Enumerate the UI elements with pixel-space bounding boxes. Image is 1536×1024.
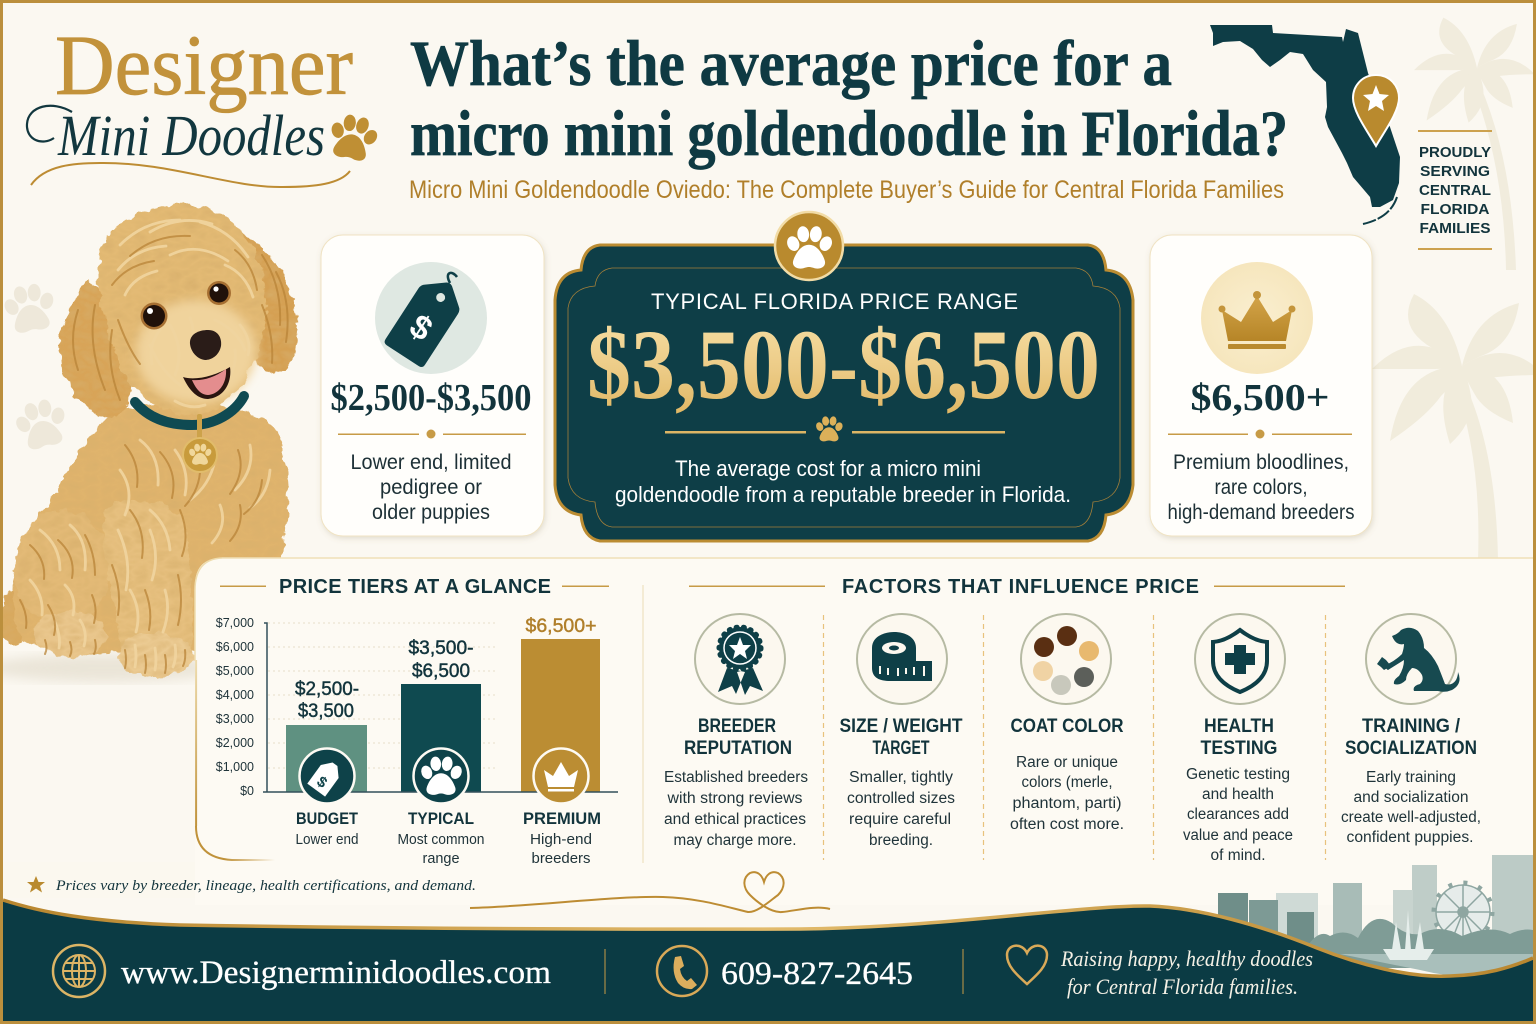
factor: size and weight target: SIZE / WEIGHT — [840, 716, 963, 737]
proudly serving note — [1418, 130, 1492, 250]
factor: breeder reputation — [664, 614, 808, 849]
footer tagline: Raising happy, healthy doodles — [1060, 946, 1313, 971]
icon: heart — [1007, 946, 1047, 984]
chart axes — [263, 623, 618, 792]
factor: health testing: value and peace — [1183, 827, 1293, 844]
bar: budget — [286, 725, 367, 792]
tier label: budget: Lower end — [296, 831, 358, 848]
chart y axis labels: $4,000 — [216, 688, 254, 702]
chart y axis labels — [216, 616, 254, 798]
map pin — [1353, 75, 1399, 146]
bar: typical — [401, 684, 481, 792]
icon: award ribbon — [695, 614, 785, 704]
Florida map with pin — [1210, 25, 1400, 224]
proudly serving note: FLORIDA — [1420, 202, 1490, 218]
tier label: premium — [523, 809, 601, 867]
map: Florida silhouette — [1210, 25, 1400, 207]
plaque medallion — [775, 212, 843, 280]
tier label: premium: breeders — [532, 850, 590, 867]
factor: training and socialization: confident puppies. — [1346, 829, 1474, 846]
factor: breeder reputation: Established breeders — [664, 769, 808, 786]
factor: coat color: phantom, parti) — [1012, 795, 1122, 812]
tier label: typical — [398, 809, 484, 867]
plaque price: $3,500-$6,500 — [587, 309, 1100, 420]
paw print watermark: upper — [0, 280, 61, 336]
factor: health testing: HEALTH — [1204, 716, 1274, 737]
footer band — [3, 900, 1533, 1021]
tier label: budget — [296, 809, 359, 848]
factor: size and weight target: TARGET — [872, 738, 930, 759]
budget price: $2,500-$3,500 — [330, 377, 532, 419]
phone number: 609-827-2645 — [721, 956, 913, 992]
puppy collar — [135, 396, 244, 425]
panel: premium price card — [1150, 235, 1372, 536]
city skyline — [1218, 855, 1533, 977]
premium description: Premium bloodlines, — [1173, 451, 1349, 474]
factor: coat color: often cost more. — [1010, 816, 1124, 833]
bar value: budget: $3,500 — [298, 701, 354, 722]
tier label: typical: Most common — [398, 831, 484, 848]
divider — [1168, 430, 1352, 438]
icon: health shield — [1195, 614, 1285, 704]
bar value: typical — [408, 638, 474, 682]
chart gridlines — [268, 623, 495, 768]
map: Florida Keys — [1363, 197, 1397, 224]
icon: tape measure — [857, 614, 947, 704]
pin star — [1363, 85, 1389, 111]
factor: health testing: of mind. — [1210, 847, 1266, 864]
palm tree watermark: top right — [1414, 18, 1535, 270]
logo wordmark: Mini Doodles: Mini Doodles — [57, 103, 325, 168]
puppy fur shading — [20, 236, 288, 673]
icon: price tag: $ — [403, 307, 439, 349]
footer tagline: for Central Florida families. — [1067, 974, 1298, 999]
factor: training and socialization: create well-adjusted, — [1341, 809, 1481, 826]
factors heading: FACTORS THAT INFLUENCE PRICE — [842, 576, 1199, 598]
factor: health testing — [1183, 614, 1293, 864]
icon: typical paw — [414, 748, 468, 804]
proudly serving note: FAMILIES — [1420, 221, 1491, 237]
plaque description: The average cost for a micro mini — [675, 456, 981, 481]
website: www.Designerminidoodles.com — [121, 955, 551, 991]
cream background behind footnote — [3, 862, 195, 898]
factor: health testing: Genetic testing — [1186, 766, 1290, 783]
icon: budget tag — [300, 748, 354, 804]
footer tagline — [1060, 946, 1313, 999]
chart heading: PRICE TIERS AT A GLANCE — [279, 576, 551, 598]
puppy left eye — [140, 302, 168, 330]
bar value: premium: $6,500+ — [526, 616, 596, 637]
ferris wheel — [1434, 883, 1492, 950]
factor: coat color: COAT COLOR — [1010, 716, 1124, 737]
fountain — [1383, 910, 1434, 960]
bar value: budget — [295, 679, 359, 722]
factor: training and socialization: TRAINING / — [1362, 716, 1461, 737]
icon: sitting dog — [1366, 614, 1460, 704]
tier label: budget: BUDGET — [296, 809, 359, 828]
logo — [27, 17, 383, 187]
chart y axis labels: $3,000 — [216, 712, 254, 726]
premium price: $6,500+ — [1190, 377, 1330, 419]
chart y axis labels: $6,000 — [216, 640, 254, 654]
icon: crown — [1201, 262, 1313, 374]
proudly serving note: PROUDLY — [1419, 145, 1491, 161]
icon: budget tag: $ — [313, 773, 331, 792]
logo wordmark: Designer: Designer — [55, 17, 353, 113]
lake — [1340, 954, 1533, 977]
premium description — [1168, 451, 1354, 524]
tier label: typical: TYPICAL — [408, 809, 474, 828]
logo flourish on M — [27, 106, 72, 142]
panel: lower information band — [195, 558, 1533, 905]
puppy mouth and tongue — [183, 367, 230, 399]
panel: budget price card — [321, 235, 544, 536]
factor: coat color: colors (merle, — [1022, 774, 1112, 791]
heart ornament — [470, 872, 830, 912]
budget description — [350, 451, 512, 524]
chart y axis labels: $5,000 — [216, 664, 254, 678]
section: price tiers chart — [216, 576, 618, 867]
factor: training and socialization: Early training — [1366, 769, 1456, 786]
section: factors that influence price — [664, 576, 1481, 864]
factor: size and weight target — [840, 614, 963, 849]
factor: breeder reputation: BREEDER — [698, 716, 776, 737]
factor: size and weight target: controlled sizes — [847, 790, 955, 807]
factor: breeder reputation: with strong reviews — [666, 790, 803, 807]
proudly serving note: SERVING — [1420, 164, 1490, 180]
panel: typical price plaque — [555, 212, 1133, 541]
paw print watermark: lower — [10, 394, 73, 453]
bar value: budget: $2,500- — [295, 679, 359, 700]
chart y axis labels: $2,000 — [216, 736, 254, 750]
icon: footnote star — [27, 876, 45, 892]
divider — [338, 430, 526, 438]
footnote: Prices vary by breeder, lineage, health certifications, and demand. — [55, 878, 476, 894]
budget description: older puppies — [372, 501, 490, 524]
factor: training and socialization: and socialization — [1354, 789, 1468, 806]
tier label: typical: range — [422, 850, 460, 867]
subtitle: Micro Mini Goldendoodle Oviedo: The Complete Buyer’s Guide for Central Florida Families — [409, 176, 1284, 204]
chart y axis labels: $1,000 — [216, 760, 254, 774]
chart y axis labels: $7,000 — [216, 616, 254, 630]
budget description: Lower end, limited — [350, 451, 512, 474]
puppy collar tag — [183, 414, 217, 472]
tree line — [1305, 919, 1533, 968]
puppy nose — [190, 330, 221, 360]
icon: price tag — [375, 262, 487, 374]
factor: size and weight target: require careful — [849, 811, 951, 828]
factor: size and weight target: breeding. — [869, 832, 933, 849]
factor: health testing: and health — [1202, 786, 1274, 803]
proudly serving note: CENTRAL — [1419, 183, 1491, 199]
factor: training and socialization — [1341, 614, 1481, 846]
logo swoosh — [31, 163, 350, 187]
plaque heading: TYPICAL FLORIDA PRICE RANGE — [651, 289, 1018, 314]
plaque divider with paw — [665, 416, 1005, 441]
puppy ground shadow — [0, 654, 223, 682]
factor: health testing: clearances add — [1187, 806, 1289, 823]
factor: health testing: TESTING — [1200, 738, 1278, 759]
puppy right eye — [207, 281, 231, 305]
puppy fur highlights — [30, 220, 270, 670]
icon: globe — [53, 945, 105, 997]
factor: coat color — [1010, 614, 1124, 833]
factor: breeder reputation: may charge more. — [674, 832, 796, 849]
bar: premium — [521, 639, 600, 792]
main title — [410, 28, 1288, 170]
icon: premium crown — [534, 748, 588, 804]
budget description: pedigree or — [380, 476, 482, 499]
icon: coat color swatches — [1021, 614, 1111, 704]
main title: micro mini goldendoodle in Florida? — [410, 98, 1288, 170]
plaque description: goldendoodle from a reputable breeder in Florida. — [615, 482, 1071, 507]
tier label: premium: High-end — [530, 831, 592, 848]
bar value: typical: $6,500 — [412, 661, 470, 682]
factor: size and weight target: Smaller, tightly — [849, 769, 953, 786]
palm tree watermark: middle right — [1372, 294, 1536, 560]
tier label: premium: PREMIUM — [523, 809, 601, 828]
premium description: high-demand breeders — [1168, 501, 1354, 524]
logo paw — [324, 110, 383, 164]
puppy fur body and head — [0, 205, 298, 677]
factor: training and socialization: SOCIALIZATION — [1345, 738, 1477, 759]
bar value: typical: $3,500- — [408, 638, 474, 659]
icon: phone — [657, 946, 707, 996]
main title: What’s the average price for a — [410, 28, 1172, 100]
puppy muzzle highlight — [136, 300, 256, 404]
chart y axis labels: $0 — [240, 784, 254, 798]
puppy illustration — [0, 205, 298, 682]
factor: breeder reputation: and ethical practices — [664, 811, 806, 828]
premium description: rare colors, — [1214, 476, 1308, 499]
plaque description — [615, 456, 1071, 507]
factor: coat color: Rare or unique — [1016, 754, 1118, 771]
factor: breeder reputation: REPUTATION — [684, 738, 792, 759]
